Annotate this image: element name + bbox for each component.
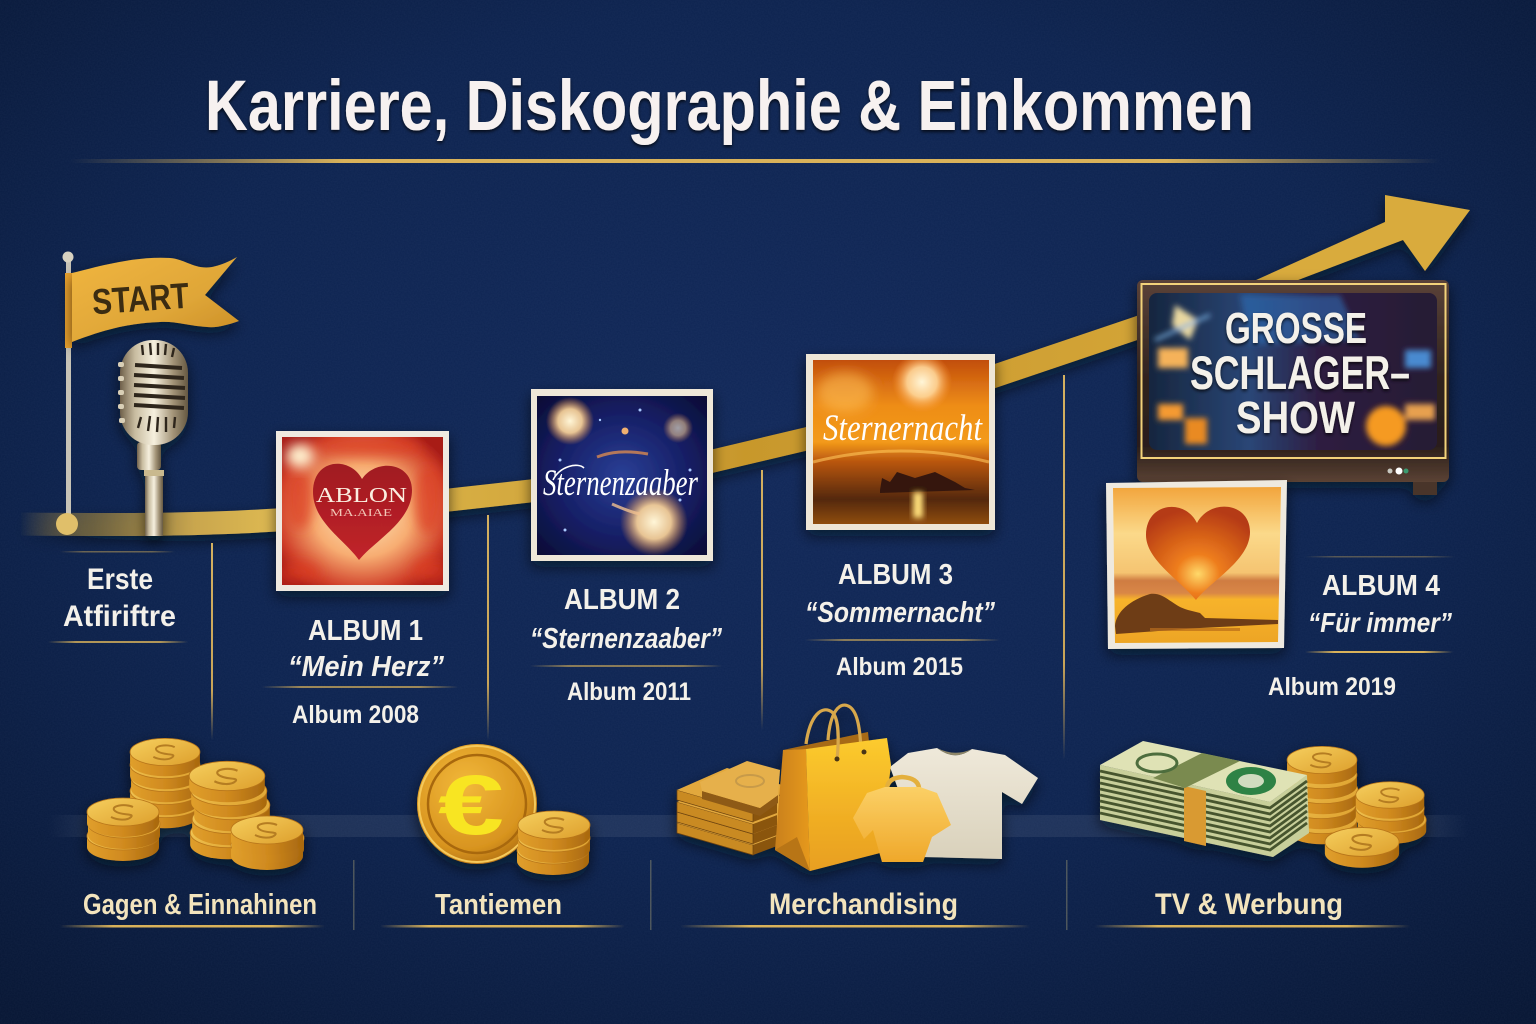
- flag label: START: [91, 275, 190, 322]
- income band: [48, 815, 1468, 837]
- album 2 text: “Sternenzaaber”: [530, 623, 722, 655]
- album 3 text: [805, 559, 1000, 681]
- text: first performances: Erste: [87, 563, 153, 596]
- TV show screen: SHOW: [1236, 392, 1355, 443]
- icon: merchandise: [677, 705, 1038, 871]
- album cover 2: Sternenzaaber: [543, 463, 698, 504]
- timeline connector lines: [211, 375, 1068, 930]
- album 1 text: [262, 615, 458, 729]
- album 2 text: ALBUM 2: [564, 584, 680, 616]
- album cover 3: [806, 352, 995, 530]
- album 1 text: “Mein Herz”: [288, 651, 444, 683]
- label: fees: Gagen & Einnahinen: [83, 889, 317, 921]
- icon: euro coin: [417, 744, 590, 875]
- album 3 text: ALBUM 3: [838, 559, 953, 591]
- album 4 text: [1268, 556, 1455, 701]
- album 3 text: Album 2015: [836, 653, 963, 681]
- title: Karriere, Diskographie & Einkommen: [205, 67, 1254, 146]
- TV show screen: SCHLAGER–: [1190, 346, 1410, 399]
- album cover 3: Sternernacht: [823, 408, 983, 449]
- album 3 text: “Sommernacht”: [805, 597, 995, 629]
- icon: start flag: [56, 252, 239, 535]
- icon: microphone: [118, 340, 188, 536]
- text: first performances: Atfiriftre: [63, 600, 176, 633]
- icon: euro coin: €: [438, 758, 504, 852]
- album cover 1: MA.AIAE: [330, 508, 392, 519]
- label: TV and advertising: TV & Werbung: [1155, 888, 1343, 921]
- TV show screen: GROSSE: [1225, 304, 1367, 353]
- album cover 2: [531, 389, 713, 561]
- TV show screen: [1137, 280, 1449, 495]
- album cover 4: [1106, 480, 1287, 649]
- album 1 text: Album 2008: [292, 701, 419, 729]
- label: merchandising: Merchandising: [769, 888, 958, 921]
- label: royalties: Tantiemen: [435, 889, 562, 921]
- album 4 text: “Für immer”: [1308, 607, 1452, 638]
- career ribbon with arrow: [20, 195, 1470, 525]
- album cover 1: ABLON: [316, 483, 407, 507]
- album 1 text: ALBUM 1: [308, 615, 423, 647]
- album 4 text: ALBUM 4: [1322, 570, 1440, 602]
- icon: coin stacks: [87, 738, 304, 870]
- album 2 text: Album 2011: [567, 678, 691, 706]
- icon: banknotes and coins: [1100, 741, 1426, 868]
- album 4 text: Album 2019: [1268, 673, 1396, 701]
- text: first performances: [48, 551, 188, 643]
- album cover 1: [276, 431, 449, 591]
- album 2 text: [530, 584, 722, 706]
